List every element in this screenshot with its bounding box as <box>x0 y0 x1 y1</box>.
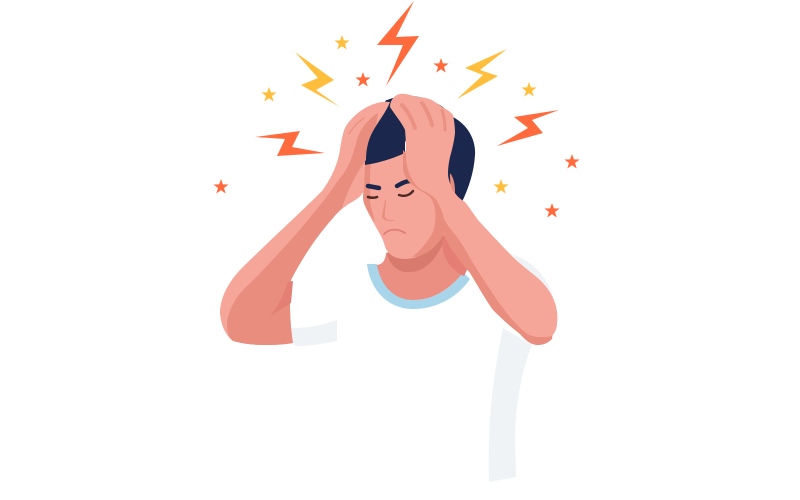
neck and chest <box>367 225 470 309</box>
star 2 <box>355 72 371 86</box>
arm: right <box>390 94 557 345</box>
hairline shadow <box>363 163 375 222</box>
star 3 <box>433 58 449 72</box>
star 7 <box>493 179 509 194</box>
star 4 <box>261 87 277 102</box>
face <box>363 150 445 259</box>
arm light outer <box>220 102 390 345</box>
torso shadow strip <box>489 328 532 482</box>
star 8 <box>544 203 560 218</box>
mouth <box>384 230 405 234</box>
finger line 3 <box>442 110 445 130</box>
hand crease line <box>349 118 364 134</box>
eyebrow: left <box>368 186 379 188</box>
finger lines <box>402 103 445 130</box>
face base <box>364 150 445 259</box>
hair: back <box>385 96 475 202</box>
star 6 <box>564 154 580 168</box>
bolt: top <box>377 1 419 86</box>
sleeve cuff: left <box>291 320 337 346</box>
shirt shading <box>291 254 553 482</box>
neck shadow <box>387 225 445 272</box>
eyebrow: right <box>397 181 410 186</box>
arm shade <box>227 113 378 345</box>
bolt: upper left yellow <box>295 52 340 107</box>
star 5 <box>521 82 537 96</box>
hair: front <box>365 100 405 165</box>
neck pink shade <box>442 235 468 276</box>
elbow crease <box>270 281 293 316</box>
face shadow band <box>403 150 455 257</box>
wrist crease <box>450 173 455 193</box>
bolt: right orange <box>497 110 559 146</box>
eye: left <box>368 196 377 199</box>
finger line 1 <box>402 105 415 128</box>
arm: left <box>220 102 390 345</box>
stars <box>213 35 580 218</box>
arm shade <box>440 210 553 345</box>
bolt: upper right yellow <box>457 49 507 99</box>
star 9 <box>213 179 229 194</box>
lightning bolts <box>255 1 559 156</box>
palm light patch <box>343 165 365 207</box>
bolt: left orange <box>255 131 325 156</box>
nose <box>382 200 396 221</box>
collar <box>367 264 470 309</box>
chest skin <box>377 235 465 300</box>
finger line 2 <box>422 103 432 125</box>
hand and forearm <box>390 94 557 337</box>
sleeve shadow: right <box>512 254 553 300</box>
star 1 <box>334 35 350 50</box>
eye: right <box>399 191 413 196</box>
